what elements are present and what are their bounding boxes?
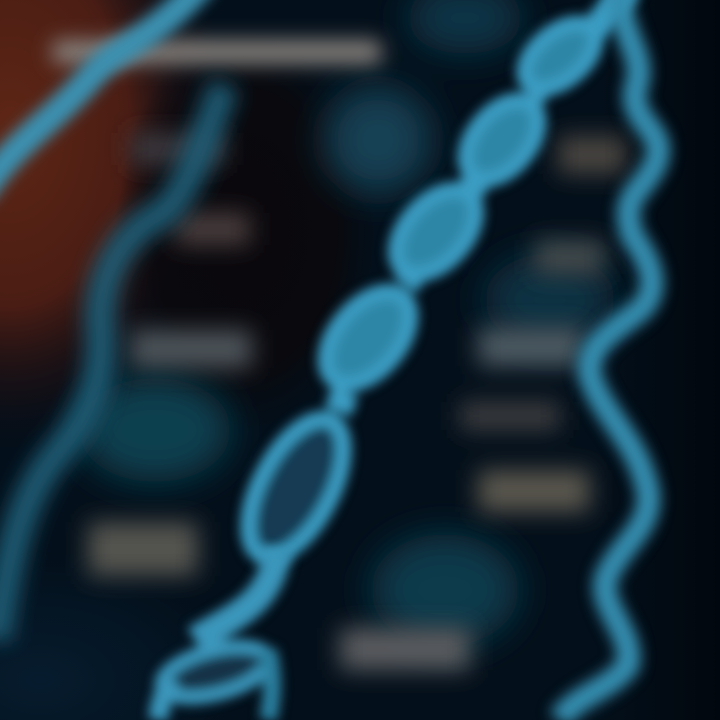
DNA strand: faint left: [0, 85, 225, 640]
DNA helix: main diagonal rings: [229, 0, 630, 572]
DNA strand: top left: [0, 0, 205, 195]
title bar: [52, 40, 382, 64]
DNA helix: lower section: [156, 550, 278, 720]
DNA strand: wavy right: [560, 0, 658, 720]
background shade: right edge: [600, 0, 720, 720]
helix links: [338, 0, 630, 412]
ring 2: [309, 276, 427, 400]
text blocks, blurred: [88, 133, 626, 670]
ring 5: [512, 11, 608, 101]
teal background circles: [79, 0, 616, 646]
ring 3: [380, 175, 492, 289]
ring 4: [451, 87, 553, 193]
ring 1: [229, 404, 363, 572]
